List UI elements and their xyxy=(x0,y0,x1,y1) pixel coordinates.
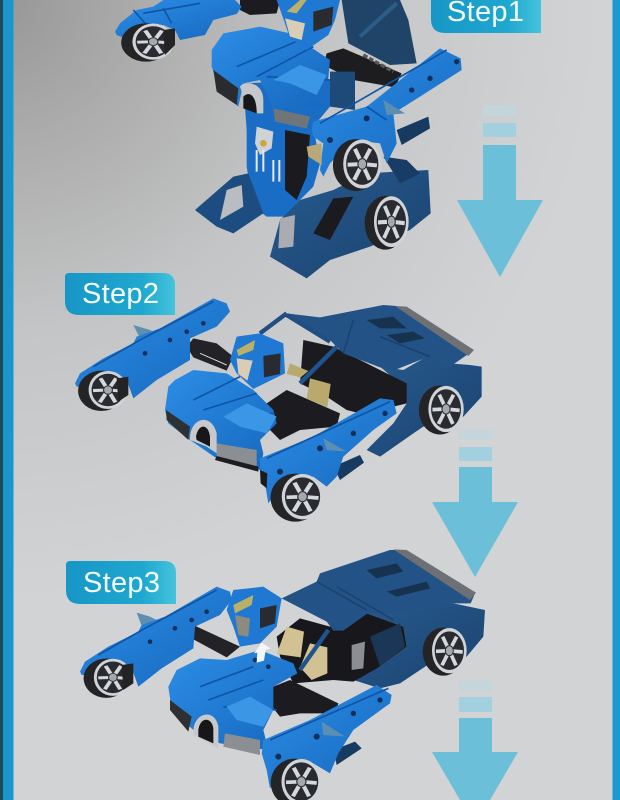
hood xyxy=(212,27,330,113)
chassis xyxy=(267,390,340,440)
chassis beam xyxy=(267,680,338,717)
right arm and wheel xyxy=(260,398,397,522)
arrow 2 xyxy=(432,430,518,577)
navy car body xyxy=(260,305,482,457)
torso xyxy=(243,80,330,217)
rear navy fin xyxy=(342,0,417,65)
badge: Step3: Step3 xyxy=(83,567,160,599)
legs and foot xyxy=(195,170,431,278)
beam xyxy=(323,48,402,87)
navy car body xyxy=(277,549,485,688)
badge: Step2 xyxy=(65,273,175,315)
front body xyxy=(165,370,277,472)
badge: Step3 xyxy=(66,561,176,604)
left arm xyxy=(75,298,233,411)
left arm and beam xyxy=(80,587,240,698)
badge: Step1 xyxy=(431,0,541,33)
left blue edge xyxy=(0,0,14,800)
head xyxy=(230,333,285,389)
front body xyxy=(168,650,297,755)
upper arm xyxy=(115,0,280,62)
right arm xyxy=(307,48,462,191)
arrow 3 xyxy=(432,680,518,800)
badge: Step2: Step2 xyxy=(82,278,159,310)
icon: white arrow xyxy=(254,643,271,663)
right arm and wheel xyxy=(262,685,392,800)
arrow 1 xyxy=(457,105,543,277)
model: step 1 robot xyxy=(115,0,462,278)
model: step 2 car xyxy=(75,298,482,522)
head xyxy=(277,0,340,50)
right blue edge xyxy=(612,0,620,800)
model: step 3 car xyxy=(80,549,485,800)
head xyxy=(227,587,282,647)
